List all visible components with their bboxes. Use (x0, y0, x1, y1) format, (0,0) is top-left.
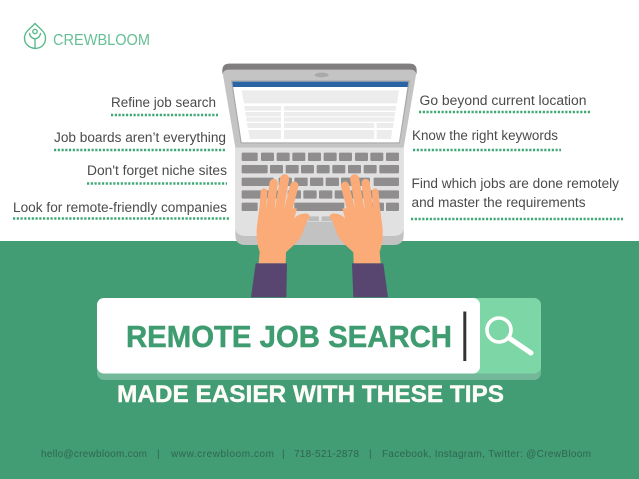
footer contact line: | (157, 449, 160, 460)
tip: find remote jobs: Find which jobs are done remotely (412, 176, 619, 191)
tip: refine job search: Refine job search (111, 95, 216, 110)
tip: niche sites: Don't forget niche sites (87, 163, 227, 178)
footer contact line: | (369, 449, 372, 460)
green background panel (0, 241, 639, 479)
title: REMOTE JOB SEARCH (126, 319, 452, 354)
laptop lid (222, 64, 417, 148)
tip: right keywords: Know the right keywords (412, 128, 558, 143)
logo: Crewbloom (24, 24, 150, 49)
footer contact line (41, 449, 591, 460)
search bar (97, 298, 541, 380)
footer contact line: | (282, 449, 285, 460)
logo wordmark: CREWBLOOM (53, 32, 150, 49)
keyboard keys (242, 153, 399, 221)
laptop base (235, 148, 404, 245)
laptop screen (232, 82, 408, 142)
search bar shadow (97, 304, 541, 380)
right hand (330, 179, 383, 263)
text cursor (463, 312, 466, 361)
tip: remote-friendly companies: Look for remote-friendly companies (13, 200, 227, 215)
right tips list (411, 93, 623, 219)
left hand (257, 179, 310, 263)
icon: leaf with person (24, 24, 46, 48)
footer contact line: Facebook, Instagram, Twitter: @CrewBloom (382, 449, 591, 460)
left sleeve (251, 263, 287, 297)
icon: magnifying glass (487, 318, 531, 353)
tip: beyond current location: Go beyond current location (420, 93, 586, 108)
tip: job boards: Job boards aren’t everything (54, 130, 226, 145)
subtitle: MADE EASIER WITH THESE TIPS (117, 381, 504, 408)
search input (97, 298, 480, 374)
right sleeve (352, 263, 388, 297)
tip: find remote jobs (411, 176, 623, 219)
footer contact line: 718-521-2878 (294, 449, 359, 460)
search button (460, 298, 541, 374)
tip: find remote jobs: and master the requirements (412, 195, 586, 210)
footer contact line: www.crewbloom.com (170, 449, 274, 460)
footer contact line: hello@crewbloom.com (41, 449, 147, 460)
laptop illustration (222, 64, 417, 297)
left tips list (13, 95, 229, 218)
